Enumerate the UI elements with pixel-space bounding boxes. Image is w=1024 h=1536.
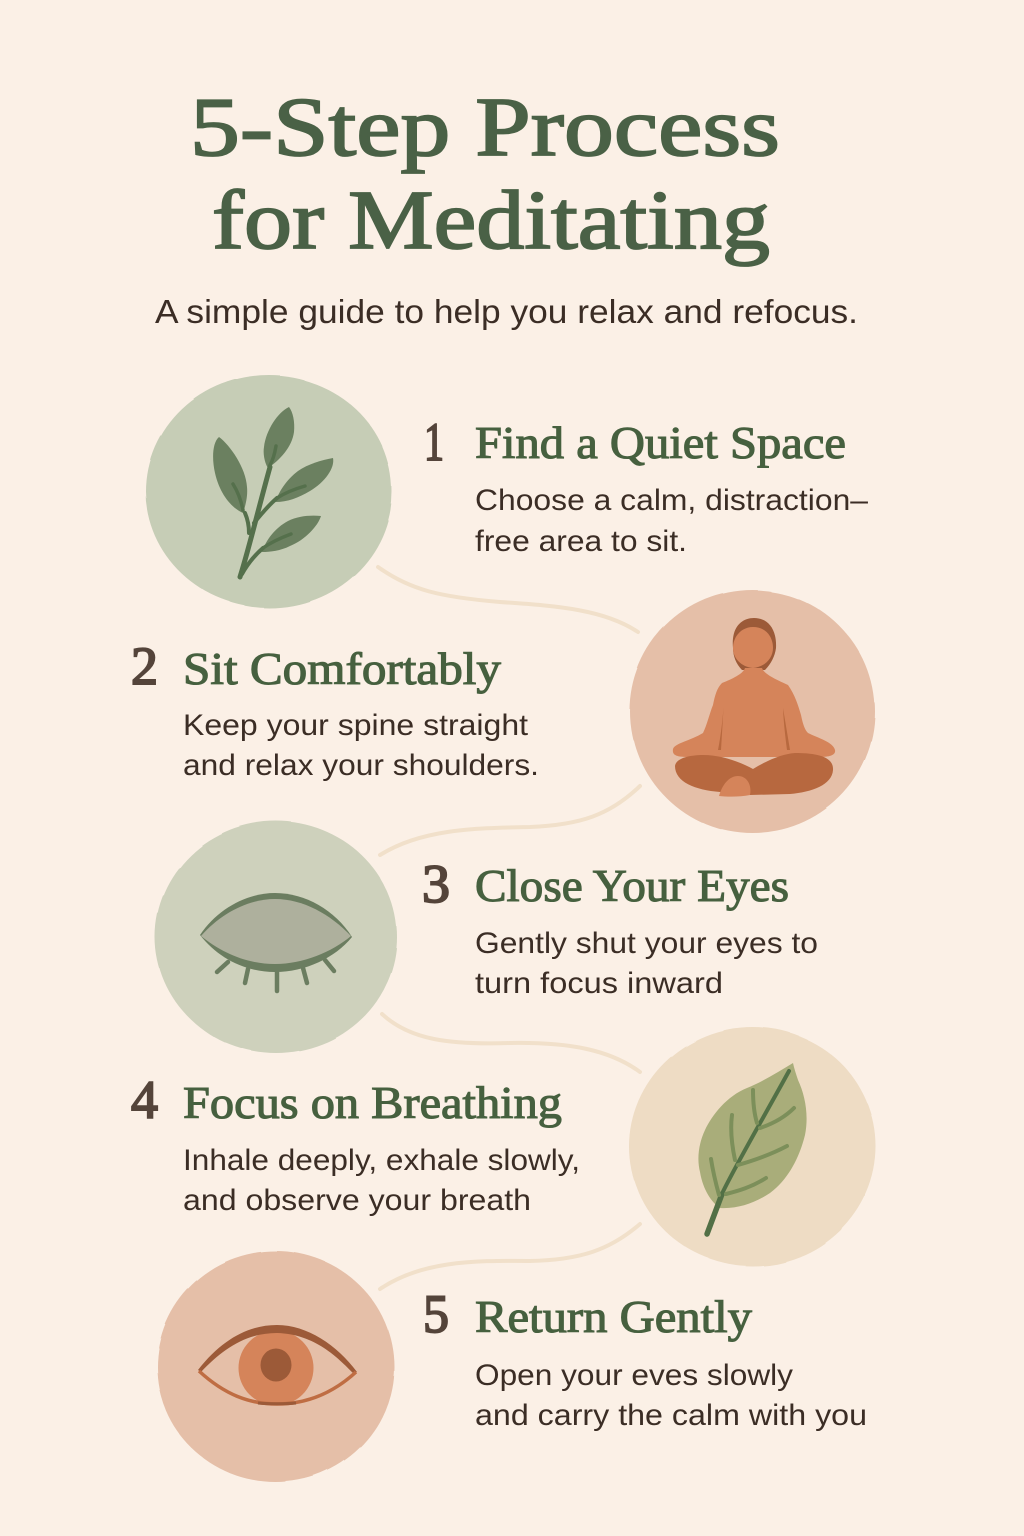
step 3: 3 <box>422 854 450 914</box>
step 1: free area to sit. <box>475 525 687 558</box>
step 3: turn focus inward <box>475 967 723 1000</box>
step 3 <box>422 854 818 1000</box>
step 3: Close Your Eyes <box>475 861 789 911</box>
icon: sprig of leaves <box>146 375 392 608</box>
connector: step 2 to step 3 <box>380 786 640 855</box>
step 2 <box>131 636 539 782</box>
connector: step 1 to step 2 <box>378 567 638 632</box>
step 5: 5 <box>423 1284 449 1344</box>
step 5: and carry the calm with you <box>475 1399 867 1432</box>
step 4: and observe your breath <box>183 1184 531 1217</box>
step 4: Focus on Breathing <box>183 1078 562 1128</box>
step 5: Return Gently <box>475 1292 753 1342</box>
step 2: 2 <box>131 636 158 696</box>
subtitle: A simple guide to help you relax and refocus. <box>155 293 858 330</box>
step 2: Keep your spine straight <box>183 709 529 742</box>
icon: meditating person <box>630 590 875 833</box>
step 5 <box>423 1284 867 1432</box>
icon: single leaf <box>629 1027 876 1266</box>
step 1: Choose a calm, distraction– <box>475 484 868 517</box>
step 2: and relax your shoulders. <box>183 749 539 782</box>
connector: step 3 to step 4 <box>382 1014 640 1072</box>
step 3: Gently shut your eyes to <box>475 927 818 960</box>
title: 5-Step Process <box>190 81 780 174</box>
step 1: 1 <box>424 412 444 472</box>
connector: step 4 to step 5 <box>380 1224 640 1289</box>
step 4: Inhale deeply, exhale slowly, <box>183 1144 580 1177</box>
title: for Meditating <box>212 174 770 267</box>
icon: open eye <box>157 1251 394 1482</box>
step 4 <box>131 1070 580 1217</box>
step 1 <box>424 412 868 558</box>
step 2: Sit Comfortably <box>183 644 502 694</box>
icon: closed eye <box>155 821 397 1053</box>
title <box>190 81 780 267</box>
step 5: Open your eves slowly <box>475 1359 793 1392</box>
step 4: 4 <box>131 1070 158 1130</box>
step 1: Find a Quiet Space <box>475 418 846 468</box>
